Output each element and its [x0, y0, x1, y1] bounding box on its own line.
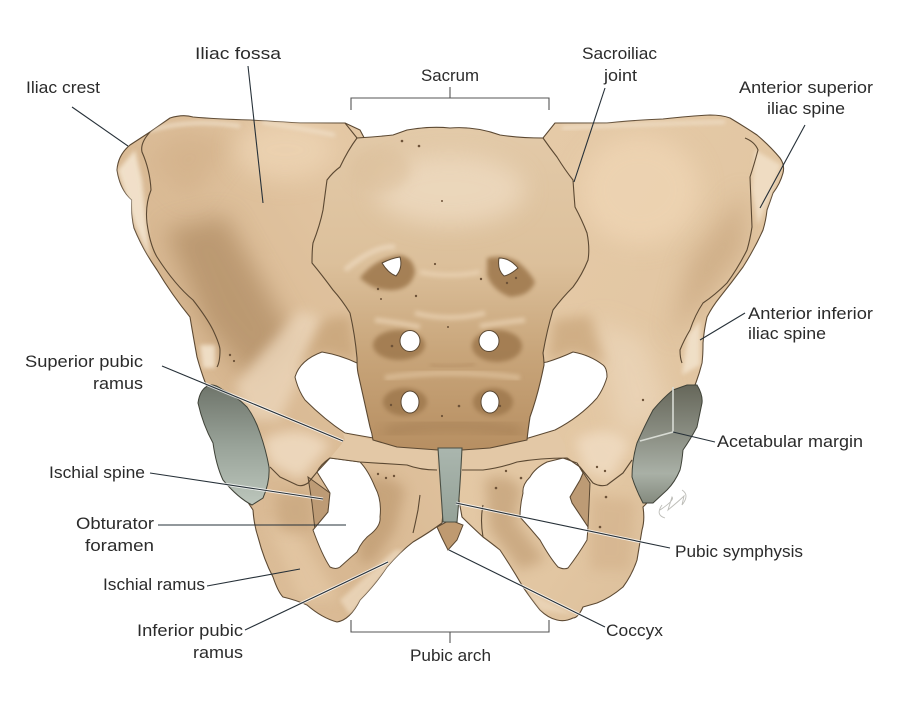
right pelvic opening: [515, 352, 607, 442]
label: Pubic symphysis: Pubic symphysis: [675, 542, 803, 561]
label: Obturator foramen: [76, 514, 346, 555]
label: Pubic arch with bracket: Pubic arch: [410, 646, 491, 665]
label: Anterior inferior iliac spine: [700, 304, 873, 343]
label: Acetabular margin: [640, 387, 863, 451]
label: Inferior pubic ramus: [137, 562, 388, 662]
left hip bone: [117, 116, 450, 622]
right lunate surface: [632, 385, 702, 503]
label: Sacrum with bracket: Sacrum: [421, 66, 479, 85]
right iliac rim line: [680, 138, 758, 363]
label: Iliac fossa: [195, 44, 282, 203]
right ischial spine: [570, 463, 590, 527]
ramus lower edge lines: [270, 458, 632, 537]
left superior pubic ramus: [330, 433, 438, 470]
label: Coccyx: Coccyx: [606, 621, 664, 640]
label: Pubic arch with bracket: [351, 620, 549, 665]
label: Ischial ramus: [103, 569, 300, 594]
coccyx: [437, 520, 463, 550]
label: Ischial spine: Ischial spine: [49, 463, 145, 482]
sacrum: [229, 127, 644, 528]
label: Sacroiliac joint: joint: [603, 66, 637, 85]
label: Acetabular margin: Acetabular margin: [717, 432, 863, 451]
label: Superior pubic ramus: Superior pubic: [25, 352, 144, 371]
label: Sacroiliac joint: Sacroiliac: [582, 44, 657, 63]
right obturator foramen: [520, 458, 588, 569]
label: Obturator foramen: Obturator: [76, 514, 154, 533]
left pelvic opening: [295, 352, 385, 440]
bone pores: [229, 140, 644, 528]
label: Pubic symphysis: [456, 503, 803, 561]
label: Iliac crest: Iliac crest: [26, 78, 100, 97]
label: Coccyx: [449, 550, 664, 640]
label: Inferior pubic ramus: Inferior pubic: [137, 621, 244, 640]
label: Superior pubic ramus: ramus: [93, 374, 143, 393]
label: Anterior inferior iliac spine: iliac spine: [748, 324, 826, 343]
label: Obturator foramen: foramen: [85, 536, 154, 555]
label: Sacroiliac joint: [574, 44, 657, 182]
right hip bone: [450, 115, 784, 621]
label: Superior pubic ramus: [25, 352, 343, 441]
label: Anterior inferior iliac spine: Anterior inferior: [748, 304, 873, 323]
label: Ischial ramus: Ischial ramus: [103, 575, 205, 594]
label: Ischial spine: [49, 463, 323, 499]
label: Sacrum with bracket: [351, 66, 549, 110]
label: Anterior superior iliac spine: Anterior superior: [739, 78, 873, 97]
iliac fossa rim line: [142, 132, 220, 367]
label: Iliac fossa: Iliac fossa: [195, 44, 282, 63]
sacral foramina: [360, 255, 535, 416]
left lunate surface: [198, 385, 269, 505]
label: Inferior pubic ramus: ramus: [193, 643, 243, 662]
left obturator foramen: [313, 458, 380, 568]
right superior pubic ramus: [462, 430, 567, 470]
panel: pelvis illustration: [117, 115, 784, 622]
label: Iliac crest: [26, 78, 128, 146]
label: Anterior superior iliac spine: [739, 78, 873, 208]
pubic symphysis: [438, 448, 462, 522]
label: Anterior superior iliac spine: iliac spine: [767, 99, 845, 118]
signature: [659, 490, 686, 518]
left ischial spine: [308, 477, 330, 530]
